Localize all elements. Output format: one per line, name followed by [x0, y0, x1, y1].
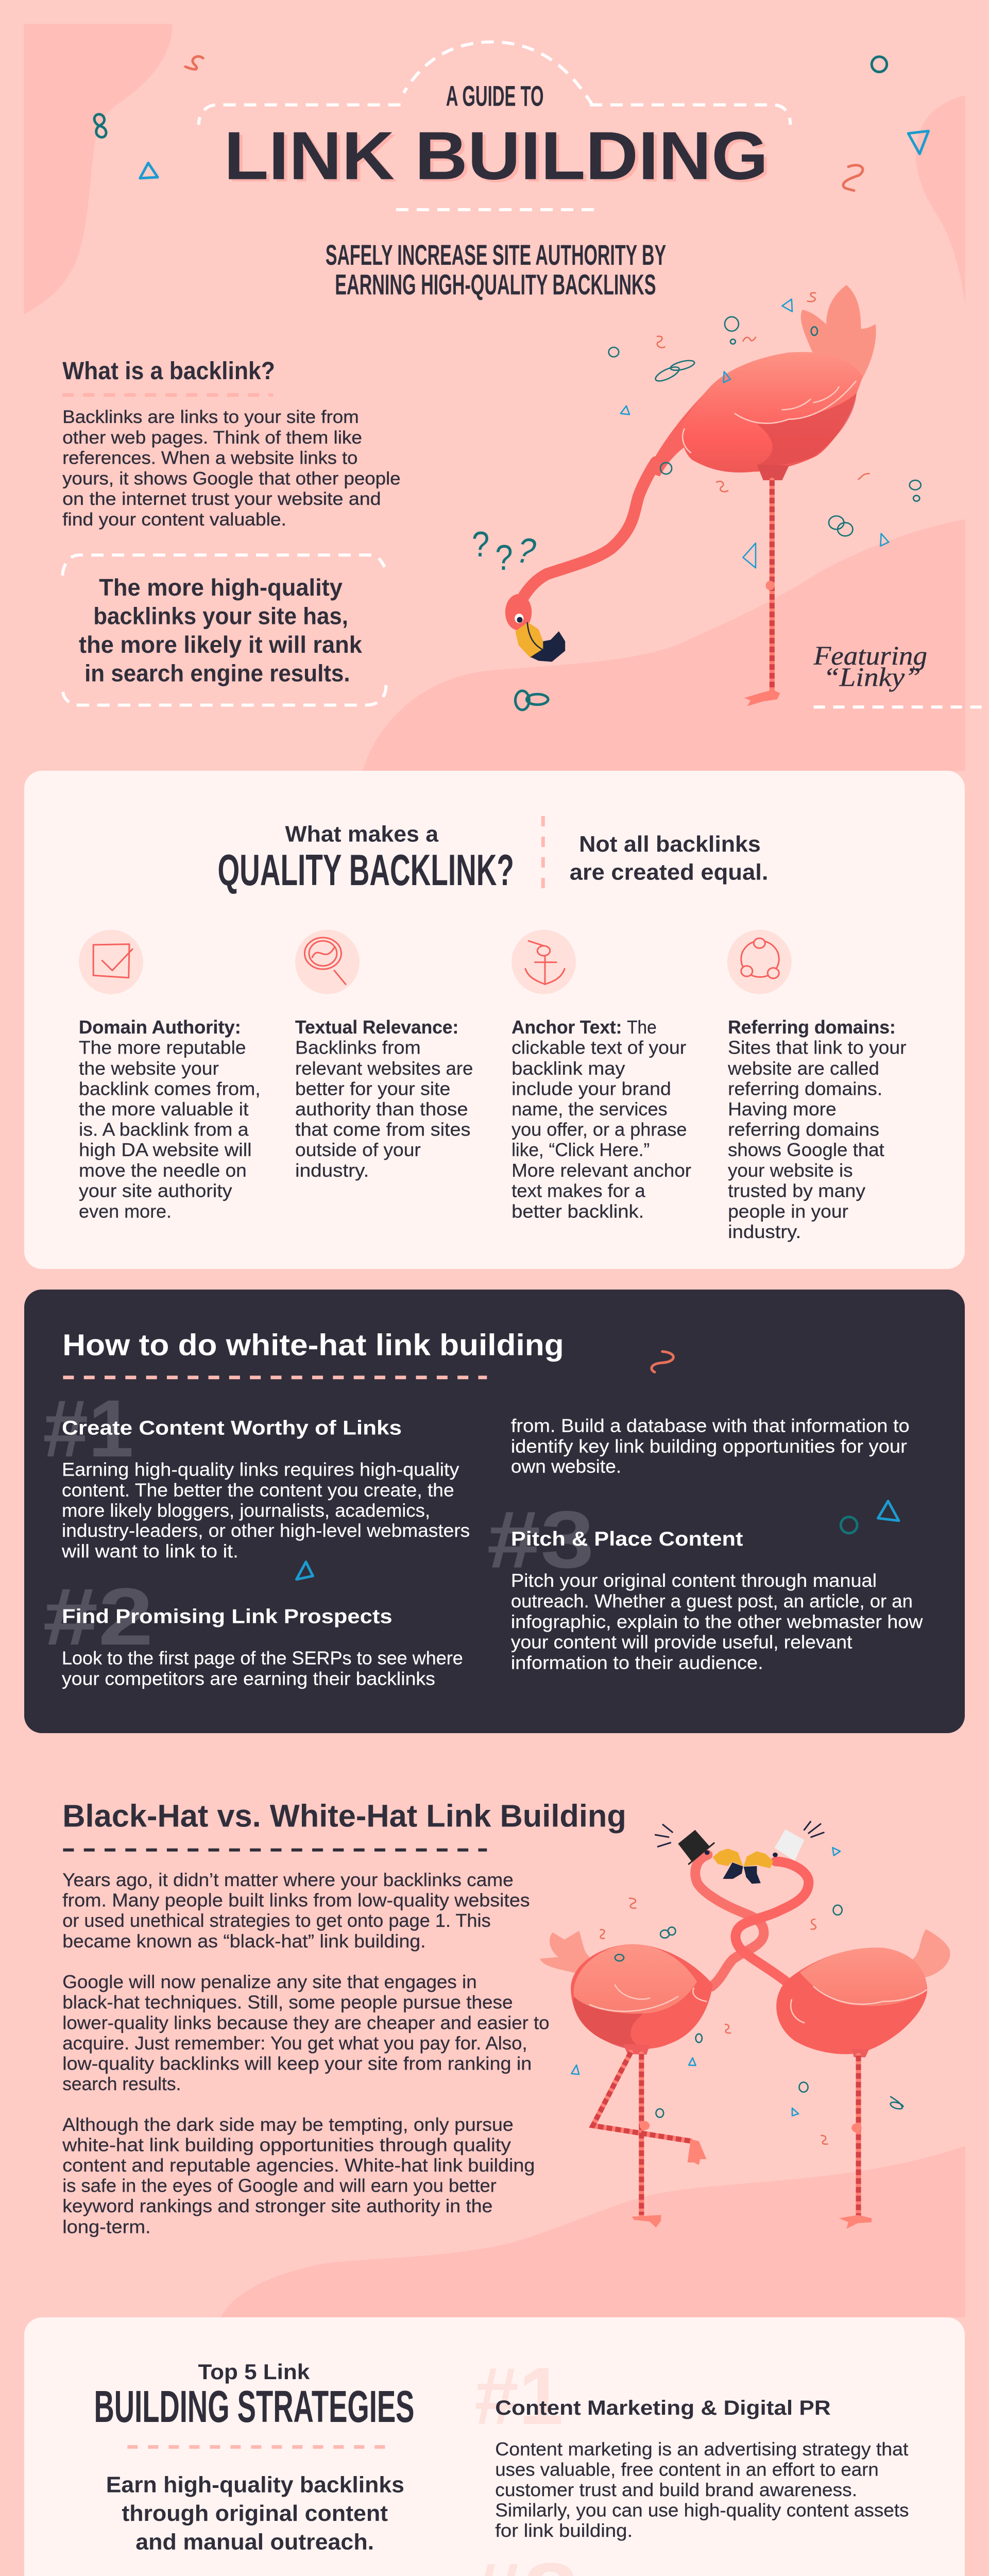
callout: more high-quality backlinks: in search engine results. [84, 660, 350, 687]
step: pitch and place content: Pitch & Place Content [511, 1528, 743, 1550]
text: backlink definition: references. When a website links to [62, 448, 357, 468]
heading: what is a backlink: What is a backlink? [62, 357, 275, 384]
step: create content: more likely bloggers, journalists, academics, [62, 1500, 430, 1521]
icon: anchor text [511, 930, 576, 994]
subtitle [326, 239, 666, 300]
callout: more high-quality backlinks [62, 555, 386, 705]
text: featuring linky [813, 641, 927, 692]
text: domain authority: the more valuable it [79, 1099, 248, 1120]
text: anchor text: include your brand [511, 1078, 671, 1099]
icon: domain authority checklist [79, 930, 143, 994]
heading: how to do white-hat: How to do white-hat link building [62, 1328, 564, 1362]
text: textual relevance: Textual Relevance: [295, 1017, 458, 1038]
text: backlink definition: other web pages. Think of them like [62, 427, 362, 448]
heading: what makes a quality backlink: What makes a [285, 821, 438, 846]
text: earn high-quality backlinks [106, 2472, 404, 2554]
text: white-hat paragraph: content and reputable agencies. White-hat link building [62, 2155, 535, 2176]
step: create content: Earning high-quality links requires high-quality [62, 1459, 459, 1480]
text: featuring linky: “Linky” [823, 663, 921, 692]
numeral 3: #3 [487, 1495, 594, 1585]
background blob right [916, 95, 965, 305]
heading: not all backlinks: are created equal. [570, 859, 768, 885]
text: referring domains: your website is [728, 1160, 853, 1181]
strategy: content marketing [495, 2396, 909, 2541]
text: domain authority: backlink comes from, [79, 1078, 261, 1099]
text: backlink definition [62, 407, 401, 530]
icons: question marks [472, 524, 541, 578]
section: black-hat vs white-hat [62, 1798, 965, 2317]
text: anchor text: name, the services [511, 1099, 668, 1120]
text: textual relevance: authority than those [295, 1099, 468, 1120]
step: pitch and place content: information to their audience. [511, 1652, 763, 1673]
background blob top left [24, 24, 172, 314]
text: referring domains: people in your [728, 1201, 848, 1222]
background wave bottom [363, 519, 965, 771]
text: domain authority [79, 1017, 261, 1222]
text: domain authority: the website your [79, 1058, 219, 1079]
text: anchor text: like, “Click Here.” [511, 1140, 650, 1160]
illustration: two flamingos with hats [540, 1822, 950, 2229]
text: earn high-quality backlinks: Earn high-quality backlinks [106, 2472, 404, 2497]
numeral 1: #1 [474, 2351, 563, 2442]
text: anchor text [511, 1017, 691, 1222]
icons: question marks: ? [495, 538, 513, 578]
text: domain authority: move the needle on [79, 1160, 247, 1181]
heading: top 5 link building strategies [94, 2361, 414, 2432]
heading: top 5 link building strategies: Top 5 Link [198, 2361, 310, 2384]
doodles [94, 56, 928, 710]
callout: more high-quality backlinks: The more high-quality [99, 574, 343, 601]
title: link building: LINK BUILDING [224, 117, 768, 194]
numeral 2: #2 [43, 1571, 154, 1662]
text: earn high-quality backlinks: and manual outreach. [135, 2529, 374, 2554]
text: anchor text: you offer, or a phrase [511, 1119, 687, 1140]
text: earn high-quality backlinks: through original content [122, 2501, 388, 2526]
icons: question marks: ? [511, 530, 541, 572]
text: anchor text: The [627, 1017, 657, 1038]
text: white-hat paragraph: keyword rankings and stronger site authority in the [62, 2196, 492, 2216]
text: history paragraph: from. Many people built links from low-quality websites [62, 1890, 530, 1910]
step: create content: content. The better the content you create, the [62, 1480, 454, 1501]
text: textual relevance: industry. [295, 1160, 369, 1181]
text: textual relevance: better for your site [295, 1078, 450, 1099]
section: hero [24, 24, 989, 771]
text: domain authority: high DA website will [79, 1140, 252, 1160]
text: referring domains: Having more [728, 1099, 837, 1120]
step: pitch and place content [511, 1528, 923, 1673]
illustration: flamingo looking down [505, 285, 876, 706]
text: white-hat paragraph: white-hat link building opportunities through quality [62, 2135, 511, 2155]
doodles [297, 1351, 899, 1580]
text: textual relevance: relevant websites are [295, 1058, 473, 1079]
text: featuring linky: Featuring [813, 641, 927, 671]
step: find promising link prospects [62, 1416, 910, 1689]
step: create content: industry-leaders, or other high-level webmasters [62, 1520, 470, 1541]
panel: top 5 link building strategies [24, 2317, 965, 2576]
icon: referring domains [727, 930, 792, 994]
text: google penalty paragraph: acquire. Just remember: You get what you pay for. Also, [62, 2033, 527, 2054]
text: textual relevance: Backlinks from [295, 1038, 421, 1058]
heading: not all backlinks: Not all backlinks [579, 832, 761, 857]
section: hero: A GUIDE TO [446, 80, 544, 112]
text: google penalty paragraph [62, 1972, 550, 2094]
text: referring domains: industry. [728, 1222, 801, 1242]
step: find promising link prospects: your competitors are earning their backlinks [62, 1668, 435, 1689]
title frame dashes [199, 42, 790, 210]
text: google penalty paragraph: Google will now penalize any site that engages in [62, 1972, 477, 1992]
text: domain authority: your site authority [79, 1181, 232, 1201]
text: anchor text: text makes for a [511, 1181, 645, 1201]
panel: quality backlink [24, 771, 965, 1269]
text: white-hat paragraph: Although the dark side may be tempting, only pursue [62, 2114, 514, 2135]
text: domain authority: Domain Authority: [79, 1017, 241, 1038]
text: white-hat paragraph: is safe in the eyes of Google and will earn you better [62, 2176, 497, 2196]
icons: question marks: ? [472, 524, 489, 564]
heading: what makes a quality backlink [217, 821, 514, 894]
icon: textual relevance magnifier [295, 930, 360, 994]
text: domain authority: is. A backlink from a [79, 1119, 249, 1140]
text: history paragraph [62, 1870, 530, 1952]
text: google penalty paragraph: black-hat techniques. Still, some people pursue these [62, 1992, 513, 2013]
callout: more high-quality backlinks: the more likely it will rank [79, 632, 363, 658]
step: find promising link prospects: Find Promising Link Prospects [62, 1605, 393, 1628]
doodles [571, 1848, 903, 2144]
text: domain authority: The more reputable [79, 1038, 246, 1058]
heading: not all backlinks [570, 832, 768, 885]
step: create content: Create Content Worthy of Links [62, 1416, 402, 1439]
text: anchor text: backlink may [511, 1058, 625, 1079]
panel: how to do white-hat link building [24, 1290, 965, 1733]
text: google penalty paragraph: lower-quality links because they are cheaper and easier to [62, 2012, 550, 2033]
step: find promising link prospects: own website. [511, 1456, 621, 1477]
text: textual relevance: that come from sites [295, 1119, 470, 1140]
text: textual relevance [295, 1017, 473, 1181]
text: backlink definition: Backlinks are links to your site from [62, 407, 359, 427]
panel: how to do white-hat link building: #1 [43, 1383, 134, 1474]
background wave [221, 2146, 965, 2317]
text: anchor text: better backlink. [511, 1201, 644, 1222]
text: anchor text: clickable text of your [511, 1038, 686, 1058]
step: create content: will want to link to it. [61, 1541, 238, 1562]
text: textual relevance: outside of your [295, 1140, 421, 1160]
text: backlink definition: find your content valuable. [62, 509, 286, 530]
text: white-hat paragraph: long-term. [62, 2216, 151, 2237]
text: referring domains [727, 1017, 907, 1242]
text: google penalty paragraph: low-quality backlinks will keep your site from ranking in [62, 2053, 532, 2074]
text: white-hat paragraph [62, 2114, 535, 2237]
callout: more high-quality backlinks: backlinks your site has, [93, 603, 348, 630]
text: google penalty paragraph: search results. [62, 2074, 181, 2094]
text: backlink definition: on the internet trust your website and [62, 489, 381, 509]
text: domain authority: even more. [79, 1201, 172, 1222]
step: find promising link prospects: Look to the first page of the SERPs to see where [62, 1648, 463, 1669]
strategy: content marketing: for link building. [495, 2520, 633, 2541]
text: history paragraph: Years ago, it didn’t matter where your backlinks came [62, 1870, 514, 1890]
text: anchor text: More relevant anchor [511, 1160, 691, 1181]
text: history paragraph: or used unethical strategies to get onto page 1. This [62, 1910, 491, 1931]
text: backlink definition: yours, it shows Google that other people [62, 468, 401, 488]
text: anchor text: Anchor Text: [511, 1017, 622, 1038]
text: history paragraph: became known as “black-hat” link building. [62, 1931, 426, 1952]
text: referring domains: trusted by many [728, 1181, 865, 1201]
step: create content [61, 1416, 470, 1562]
title: link building: LINK BUILDING [227, 120, 772, 196]
